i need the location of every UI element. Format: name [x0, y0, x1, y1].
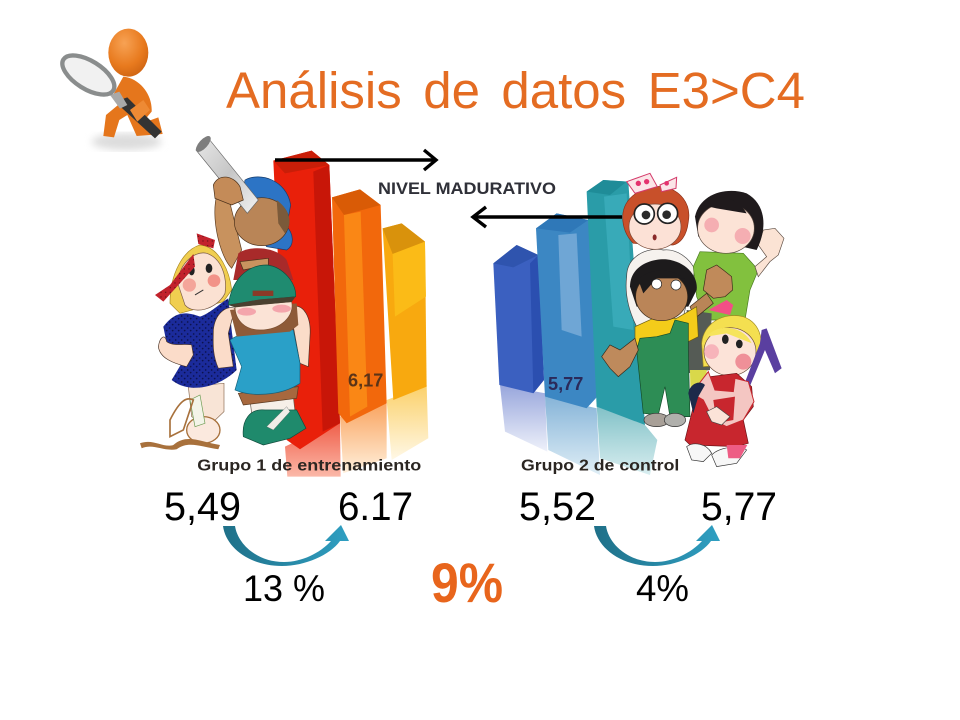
group 2 label: Grupo 2 de control [521, 458, 679, 475]
values: group 2 post-test: 5,77 [701, 485, 777, 529]
gain: group 1 percentage: 13 % [243, 568, 325, 609]
group 1 label: Grupo 1 de entrenamiento [197, 458, 422, 475]
values: group 1 pre-test: 5,49 [164, 485, 241, 529]
values: group 1 post-test: 6.17 [338, 485, 413, 529]
bar chart: group 1 reflections [285, 385, 428, 477]
arrow: top right-pointing [275, 150, 436, 170]
nivel madurativo label: NIVEL MADURATIVO [378, 180, 556, 198]
title: Análisis de datos E3>C4 [226, 62, 805, 119]
panel: group 1 chart and children [140, 134, 428, 477]
illustration: grey trousers of the waving girl [687, 310, 712, 400]
illustration: boy with telescope [193, 134, 293, 280]
illustration: boy in green overalls [602, 259, 733, 427]
values: group 2 pre-test: 5,52 [519, 485, 596, 529]
bar: orange [332, 189, 387, 423]
curved arrow: group 1 [223, 525, 349, 566]
arrow: lower left-pointing [473, 207, 622, 227]
bar chart: group 2 reflections [500, 385, 657, 475]
icon: orange figure with magnifying glass [56, 29, 163, 150]
panel: group 2 chart and children [493, 173, 784, 475]
bar: yellow [383, 223, 427, 400]
bar value: 5,77: 5,77 [548, 373, 583, 394]
illustration: small blonde girl with ribbon [685, 300, 782, 467]
illustration: dark-haired girl in green waving [693, 191, 784, 320]
illustration: girl with glasses and bow [623, 173, 695, 327]
bar: mid blue [536, 213, 597, 408]
bar: red [273, 151, 340, 449]
illustration: blonde girl in blue dress [140, 233, 237, 450]
difference: 9 percent highlight: 9% [431, 551, 503, 614]
bar value: 6,17: 6,17 [348, 370, 383, 391]
curved arrow: group 2 [594, 525, 720, 566]
bar: dark blue [493, 245, 544, 393]
bar: teal [587, 180, 645, 425]
gain: group 2 percentage: 4% [636, 568, 689, 609]
illustration: boy in green cap [213, 265, 310, 445]
